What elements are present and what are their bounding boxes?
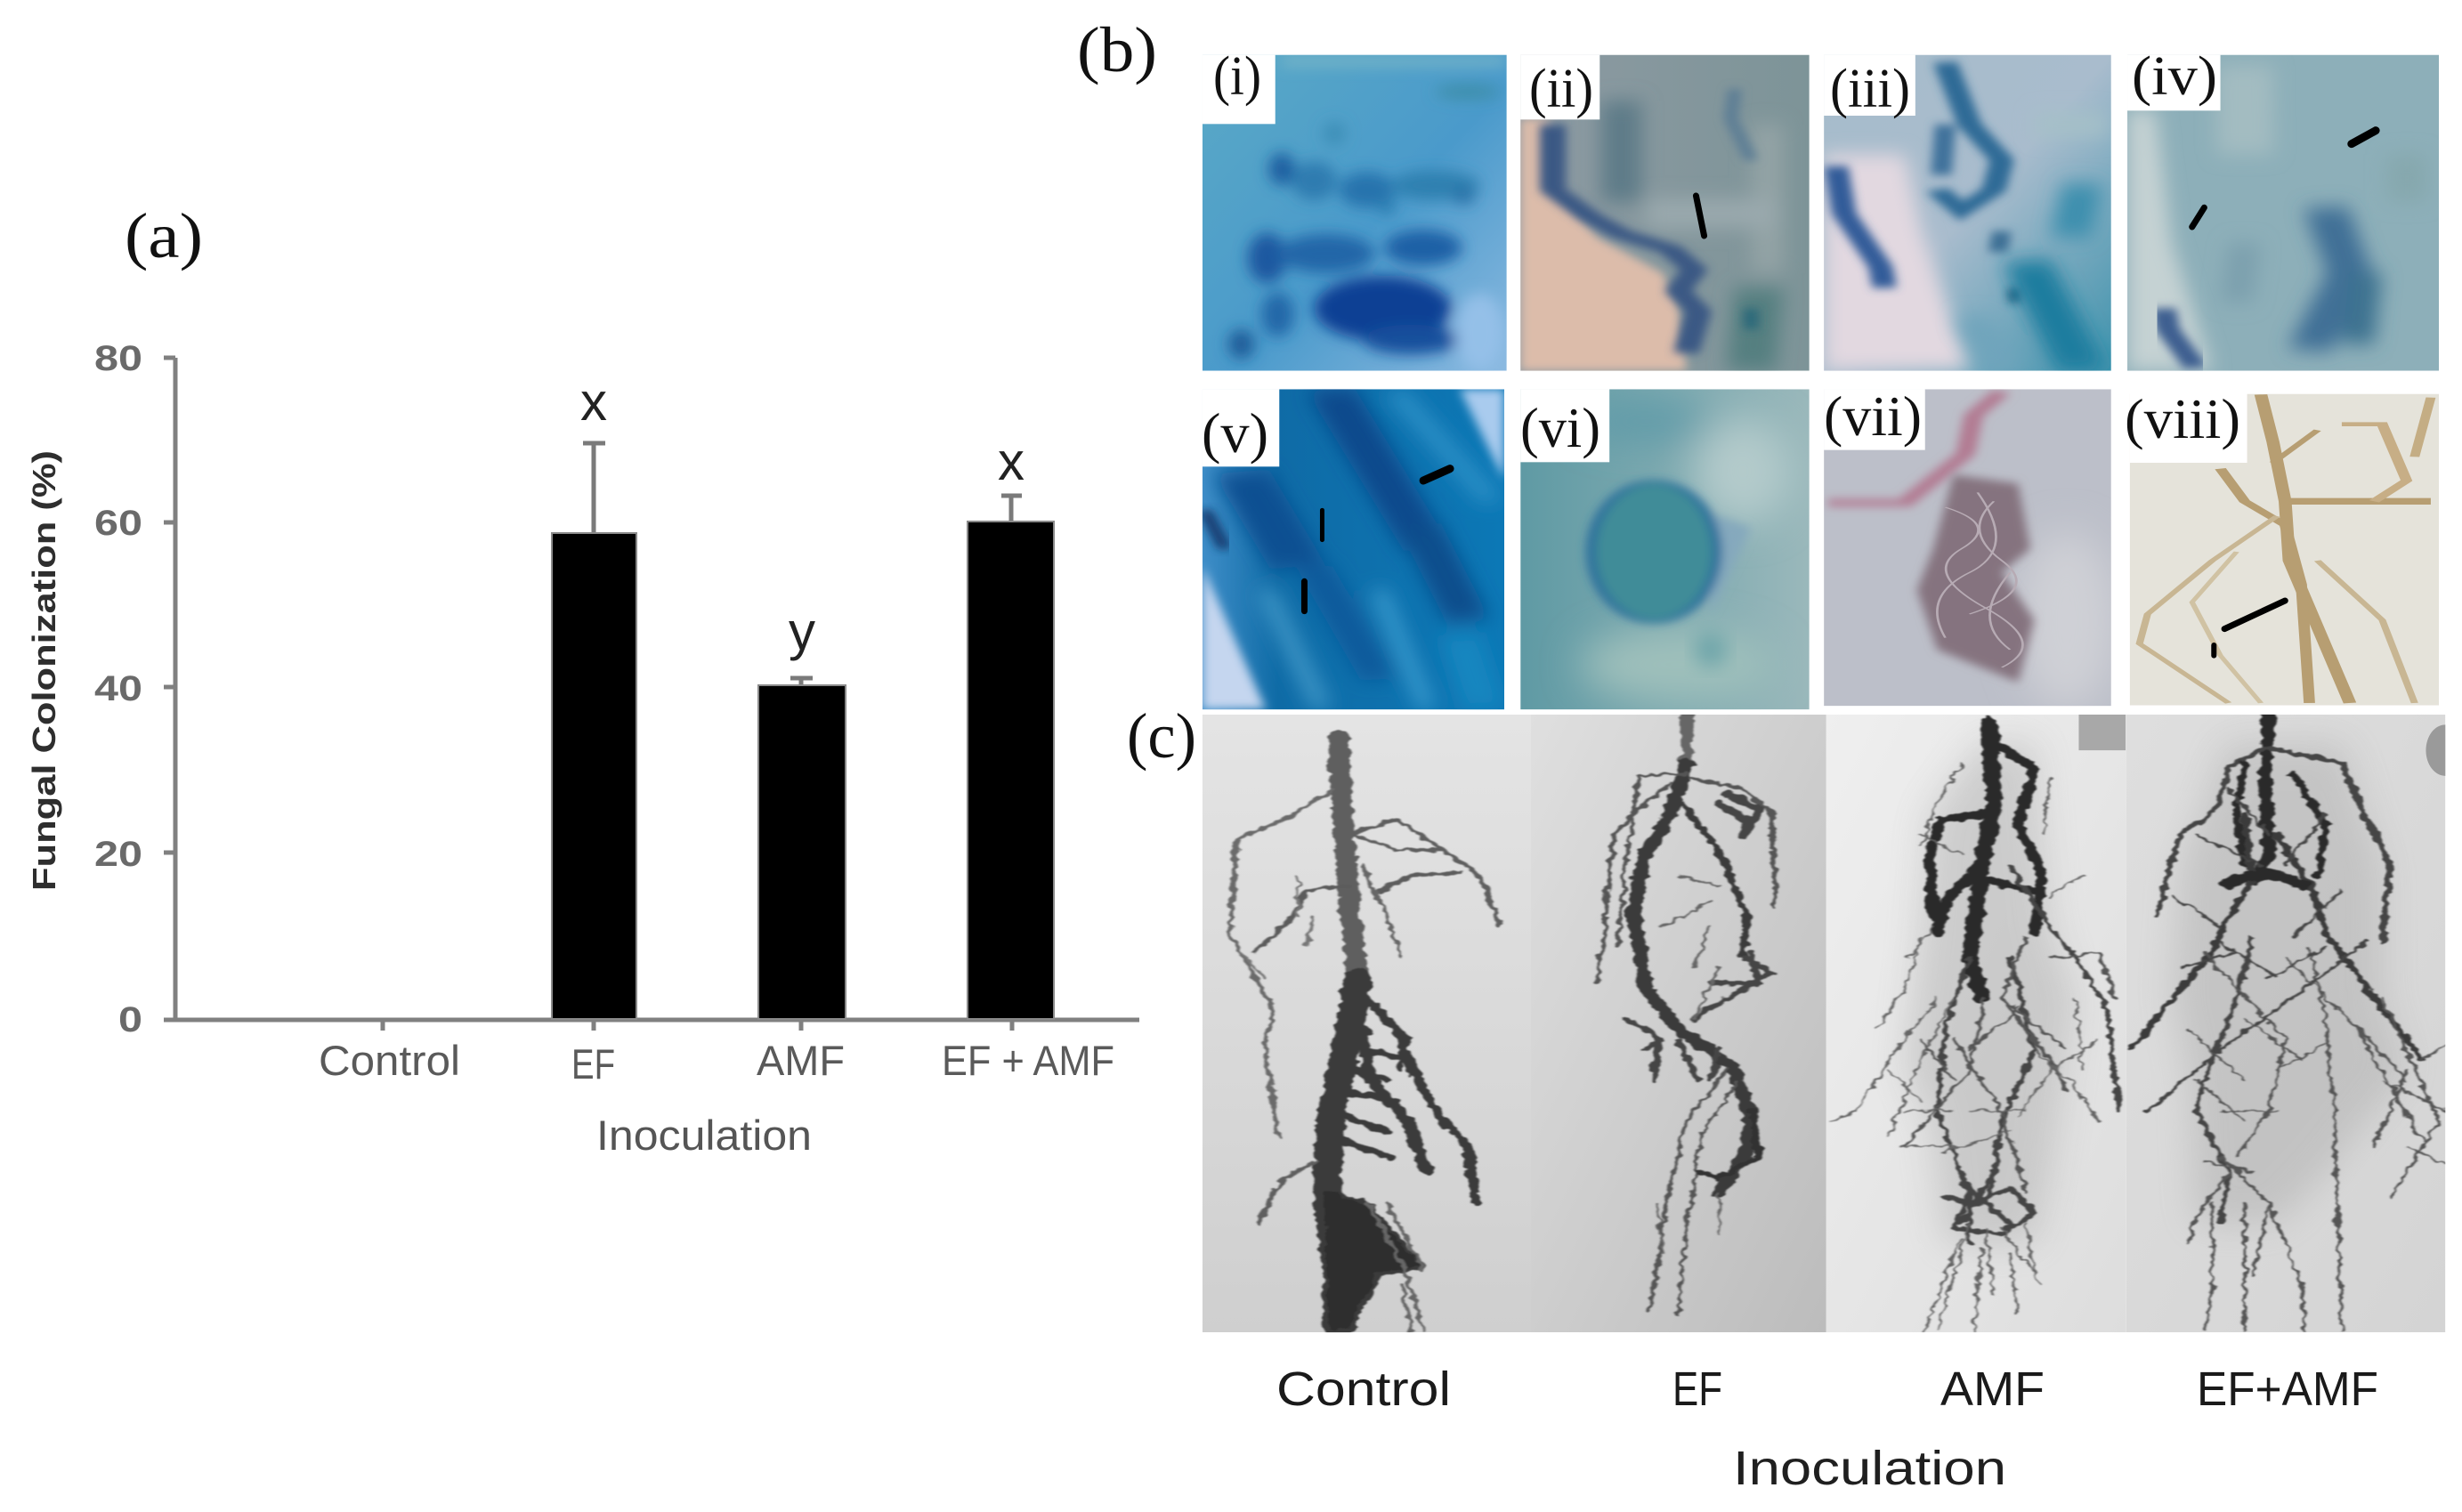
micrograph v xyxy=(1203,389,1504,709)
micrograph labels, bottom row: (vi) xyxy=(1520,396,1600,459)
category labels: EF xyxy=(571,1040,615,1088)
micrograph labels, bottom row xyxy=(1202,384,2240,465)
panel b: top row of micrographs xyxy=(1203,55,2439,371)
micrograph ii xyxy=(1520,55,1810,371)
root photo category labels: EF+AMF xyxy=(2197,1362,2378,1416)
category labels: AMF xyxy=(757,1037,845,1084)
bar: AMF xyxy=(758,678,846,1019)
significance letters: x xyxy=(998,432,1024,491)
micrograph labels, top row: (iii) xyxy=(1830,59,1910,119)
micrograph vi xyxy=(1520,389,1810,709)
micrograph labels, top row: (i) xyxy=(1213,46,1261,107)
y axis tick labels: 0 xyxy=(118,1000,142,1039)
root photo category labels: AMF xyxy=(1940,1362,2045,1416)
y axis tick labels: 60 xyxy=(94,504,142,543)
significance letters: y xyxy=(789,602,815,661)
micrograph vii xyxy=(1824,389,2115,709)
label box iii xyxy=(1824,55,1915,116)
y axis tick labels: 40 xyxy=(94,669,142,708)
root photo: Control xyxy=(1203,715,1531,1332)
y axis and x axis xyxy=(164,358,1139,1031)
root photo: EF xyxy=(1531,715,1826,1332)
panel label: (c): (c) xyxy=(1127,700,1196,772)
root photo: EF+AMF xyxy=(2126,715,2462,1332)
panel a: fungal colonization bar chart xyxy=(26,339,1139,1159)
label box viii xyxy=(2130,389,2247,463)
micrograph labels, bottom row: (vii) xyxy=(1824,384,1922,448)
category labels xyxy=(319,1037,1114,1088)
micrograph labels, top row xyxy=(1213,46,2217,119)
micrograph iii xyxy=(1824,55,2111,371)
root photo category labels: Control xyxy=(1276,1362,1451,1416)
label box vii xyxy=(1824,389,1925,450)
category labels: Control xyxy=(319,1037,460,1084)
micrograph i xyxy=(1203,55,1507,371)
micrograph labels, top row: (iv) xyxy=(2132,46,2217,107)
significance letters xyxy=(580,372,1024,661)
micrograph labels, bottom row: (v) xyxy=(1202,401,1268,465)
y axis tick labels: 80 xyxy=(94,339,142,378)
root photo axis title: Inoculation xyxy=(1733,1442,2006,1495)
root photo: AMF xyxy=(1826,715,2126,1332)
label box vi xyxy=(1520,389,1609,462)
label box i xyxy=(1203,55,1276,124)
micrograph viii xyxy=(2130,394,2439,706)
root photo category labels xyxy=(1276,1362,2378,1416)
micrograph labels, bottom row: (viii) xyxy=(2125,387,2240,450)
y axis tick labels: 20 xyxy=(94,835,142,874)
label box ii xyxy=(1520,55,1599,119)
micrograph iv xyxy=(2127,55,2439,371)
panel label: (a): (a) xyxy=(125,200,203,271)
bar: EF xyxy=(552,443,636,1019)
significance letters: x xyxy=(580,372,607,432)
label box iv xyxy=(2127,55,2221,110)
y axis tick labels xyxy=(94,339,142,1039)
panel label: (b): (b) xyxy=(1077,14,1157,85)
micrograph labels, top row: (ii) xyxy=(1529,59,1593,119)
y axis title: Fungal Colonization (%) xyxy=(26,450,62,891)
panel b: bottom row of micrographs xyxy=(1203,389,2439,709)
bar: EF + AMF xyxy=(968,496,1054,1019)
x axis title: Inoculation xyxy=(596,1112,812,1159)
category labels: EF + AMF xyxy=(942,1037,1114,1084)
label box v xyxy=(1203,389,1279,466)
panel c: root system photographs xyxy=(1203,715,2462,1332)
root photo category labels: EF xyxy=(1672,1362,1722,1416)
